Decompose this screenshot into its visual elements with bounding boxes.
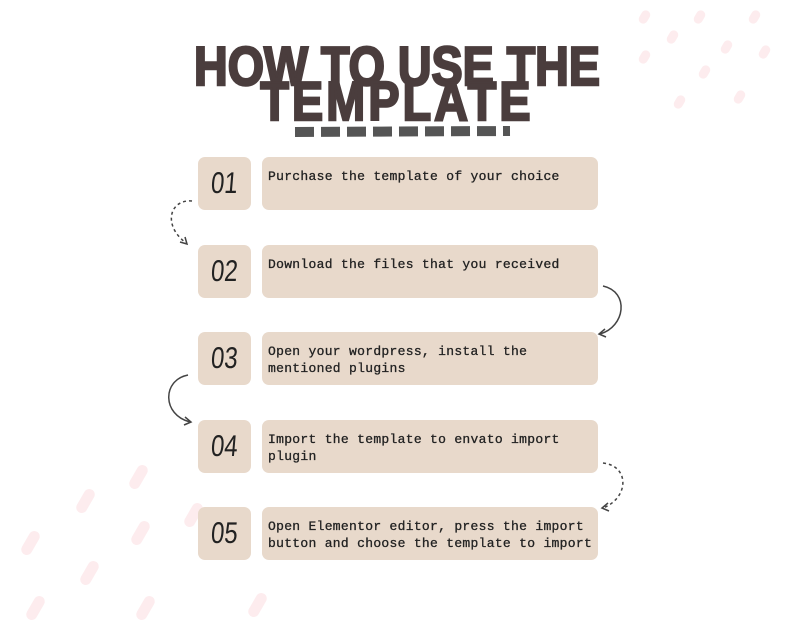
- arrow 4: [600, 462, 624, 512]
- title: HOW TO USE THE: [194, 36, 600, 98]
- step 05: 05: [210, 516, 239, 550]
- step 04: [198, 420, 598, 473]
- step 03: mentioned plugins: [268, 361, 406, 376]
- dashed underline: [295, 126, 510, 137]
- step 05: Open Elementor editor, press the import: [268, 519, 584, 534]
- step 05: [198, 507, 598, 560]
- step 03: [198, 332, 598, 385]
- arrow 2: [598, 285, 622, 338]
- step 01: [198, 157, 598, 210]
- step 01: Purchase the template of your choice: [268, 169, 560, 184]
- step 04: plugin: [268, 449, 317, 464]
- arrow 3: [168, 374, 192, 426]
- step 03: 03: [210, 341, 239, 375]
- step 02: Download the files that you received: [268, 257, 560, 272]
- step 01: 01: [210, 166, 239, 200]
- step 04: 04: [210, 429, 239, 463]
- title: [194, 36, 600, 132]
- title: TEMPLATE: [260, 71, 534, 132]
- step 02: 02: [210, 254, 239, 288]
- step 05: button and choose the template to import: [268, 536, 592, 551]
- arrow 1: [170, 200, 192, 246]
- step 04: Import the template to envato import: [268, 432, 560, 447]
- step 02: [198, 245, 598, 298]
- step 03: Open your wordpress, install the: [268, 344, 527, 359]
